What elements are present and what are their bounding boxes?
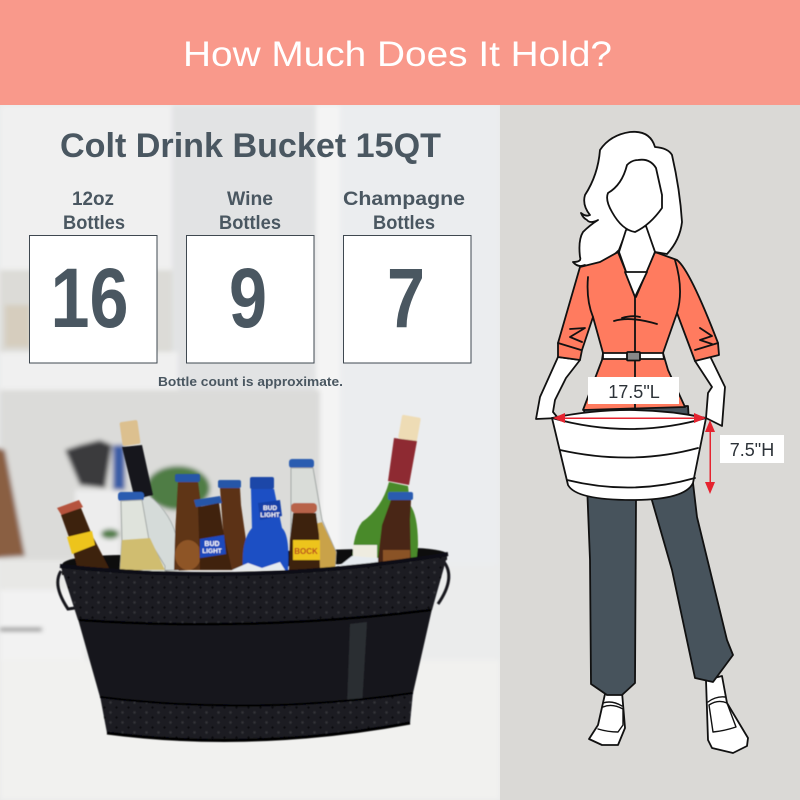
product heading: Colt Drink Bucket 15QT: [60, 127, 441, 165]
wine bottle green: [352, 415, 421, 568]
capacity: 12oz bottles: 16: [50, 251, 128, 345]
hands and forearms: [536, 357, 580, 419]
brown bottle back: [218, 480, 246, 570]
capacity: 12oz bottles: Bottles: [63, 213, 125, 234]
bud light bottle front: BUD: [204, 541, 220, 548]
capacity: champagne bottles: 7: [387, 251, 425, 345]
brown bottle right: [377, 492, 413, 567]
shirt: [558, 252, 719, 410]
clear bottle right: [289, 459, 336, 568]
bucket lower band: [100, 692, 413, 741]
blue aluminum bottle: LIGHT: [260, 512, 280, 519]
capacity: wine bottles: Wine: [227, 189, 273, 210]
photo background: kitchen: [0, 105, 500, 800]
neck: [619, 226, 655, 300]
bucket perforated band: [60, 553, 448, 624]
header band: [0, 0, 800, 105]
bock bottle: [289, 503, 320, 570]
bucket handles: [58, 571, 75, 609]
footnote: Bottle count is approximate.: [158, 375, 343, 389]
blue aluminum bottle: [243, 477, 288, 570]
feet and shoes: [589, 676, 748, 753]
corona bottle: [118, 492, 165, 572]
arrow: length: [553, 413, 706, 423]
bucket rim: [60, 554, 448, 574]
bud light bottle front: LIGHT: [202, 548, 222, 555]
bud light bottle front: [194, 496, 232, 570]
capacity: 12oz bottles: 12oz: [72, 189, 114, 210]
capacity: 12oz bottles: [30, 189, 157, 363]
height label: [720, 435, 784, 463]
white bucket: [552, 410, 706, 500]
face: [607, 160, 662, 232]
capacity: champagne bottles: Champagne: [343, 189, 465, 210]
arrow: height: [705, 420, 715, 494]
capacity: wine bottles: Bottles: [219, 213, 281, 234]
height label: 7.5"H: [730, 440, 774, 460]
bock bottle: BOCK: [294, 547, 318, 556]
capacity: wine bottles: [186, 189, 314, 363]
capacity: champagne bottles: Bottles: [373, 213, 435, 234]
capacity: wine bottles: 9: [229, 251, 267, 345]
wine bottle clear: [119, 420, 178, 570]
length label: 17.5"L: [608, 382, 660, 402]
beer bottle left with label: [57, 500, 109, 570]
illustration: woman holding bucket: [536, 132, 748, 753]
bucket inner back: [62, 548, 447, 575]
ice: [232, 556, 378, 570]
photo: drink bucket with bottles: [57, 415, 450, 755]
length label: [588, 377, 679, 404]
pants: [584, 406, 733, 695]
bucket body: [78, 609, 432, 706]
right panel: [500, 105, 800, 800]
brown bottle tall: [174, 474, 205, 570]
capacity: champagne bottles: [343, 189, 471, 363]
title: How Much Does It Hold?: [183, 35, 612, 74]
hair: [573, 132, 682, 273]
blue aluminum bottle: BUD: [263, 505, 277, 512]
